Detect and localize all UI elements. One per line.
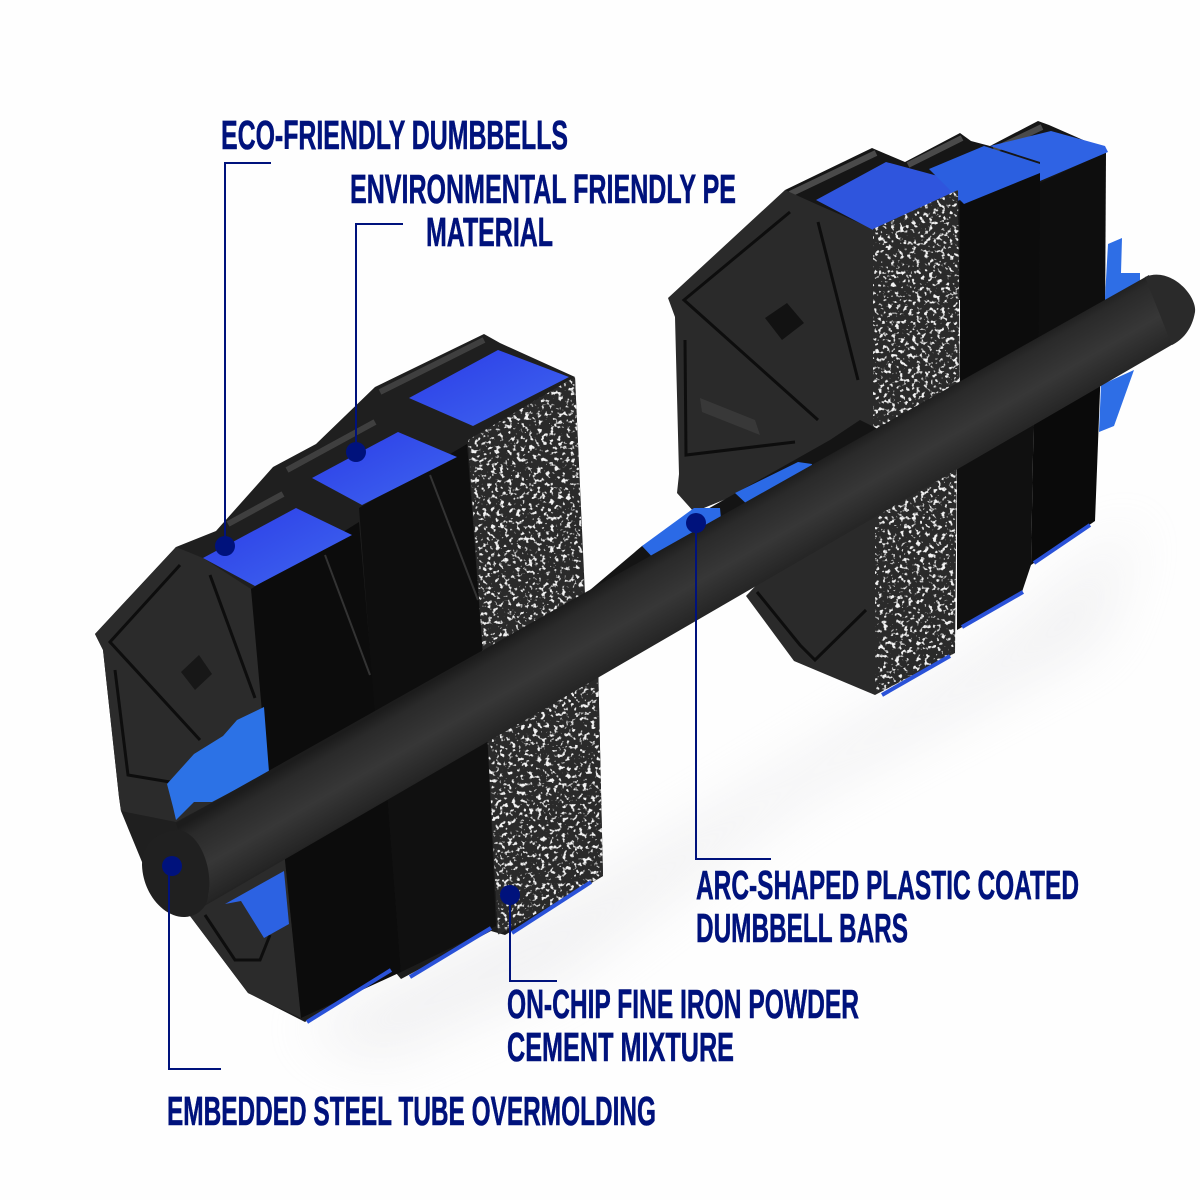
leader line [225, 163, 271, 546]
connector behind bar [590, 420, 880, 650]
leader line [696, 523, 771, 859]
callout: iron powder cement [500, 885, 859, 1070]
blue clip upper [167, 707, 269, 820]
label: ECO-FRIENDLY DUMBBELLS [221, 112, 568, 158]
blue tile rear [409, 350, 569, 426]
blue clip right lower [1099, 370, 1134, 432]
bar right end cap [1145, 275, 1195, 345]
marker dot [346, 442, 366, 462]
square recess [181, 655, 212, 690]
blue tile middle [929, 146, 1040, 204]
lower groove [205, 915, 270, 960]
iron panel lower [487, 665, 603, 935]
blue strips lower [882, 525, 1090, 695]
blue tile rear [990, 131, 1108, 181]
back top bands [785, 121, 1106, 300]
embossed mark [700, 398, 760, 435]
grey face upper [668, 190, 873, 512]
grey face lower [187, 850, 301, 1018]
leader line [356, 224, 403, 452]
label line 1: ENVIRONMENTAL FRIENDLY PE [350, 166, 736, 212]
top ridges [790, 127, 1042, 194]
label line 2: DUMBBELL BARS [696, 905, 908, 951]
blue clip lower [225, 871, 289, 938]
bar left end cap [142, 830, 209, 917]
label: EMBEDDED STEEL TUBE OVERMOLDING [167, 1088, 656, 1134]
black panels upper [960, 167, 1040, 410]
face groove lines [110, 565, 255, 782]
black panel upper rear [1038, 152, 1106, 370]
callout: steel tube [162, 856, 656, 1134]
blue runner front [642, 508, 722, 562]
label line 2: CEMENT MIXTURE [507, 1024, 734, 1070]
marker dot [500, 885, 520, 905]
right weight assembly [668, 121, 1140, 695]
callout: arc-shaped bars [686, 513, 1079, 951]
black panel 2 [359, 444, 484, 730]
black panel 1 [251, 522, 376, 790]
iron panel lower [875, 450, 957, 695]
blue tile front [203, 508, 352, 586]
black panel lower rear [1031, 365, 1101, 565]
bar body [176, 275, 1175, 908]
steel bar [142, 275, 1195, 917]
body lower [142, 660, 603, 1022]
iron panel upper [468, 377, 585, 670]
label line 2: MATERIAL [426, 209, 553, 255]
callout: eco-friendly dumbbells [215, 112, 568, 556]
blue runner rear [735, 462, 812, 508]
blue tile middle [312, 432, 457, 505]
panel ridge lines [325, 475, 478, 675]
marker dot [215, 536, 235, 556]
black panel lower 2 [387, 730, 496, 972]
grey face upper [95, 547, 269, 822]
leader line [510, 895, 557, 981]
top ridges [228, 340, 484, 524]
lower groove [757, 592, 866, 660]
blue clip right upper [1105, 238, 1140, 302]
marker dot [686, 513, 706, 533]
black panel lower [957, 400, 1034, 630]
label line 1: ON-CHIP FINE IRON POWDER [507, 981, 859, 1027]
central connector and runners [590, 420, 880, 650]
square recess [765, 303, 804, 340]
grey face lower [746, 500, 875, 695]
blue top tiles [816, 162, 960, 231]
iron panel upper [873, 190, 960, 450]
body silhouette upper [95, 334, 585, 862]
leader line [169, 870, 221, 1069]
blue strips lower [307, 882, 591, 1022]
left weight assembly [95, 334, 603, 1022]
face groove lines [684, 212, 858, 455]
floor shadow [300, 520, 1140, 1060]
marker dot [162, 856, 182, 876]
black panel lower 1 [284, 790, 401, 1018]
callout: PE material [346, 166, 736, 462]
